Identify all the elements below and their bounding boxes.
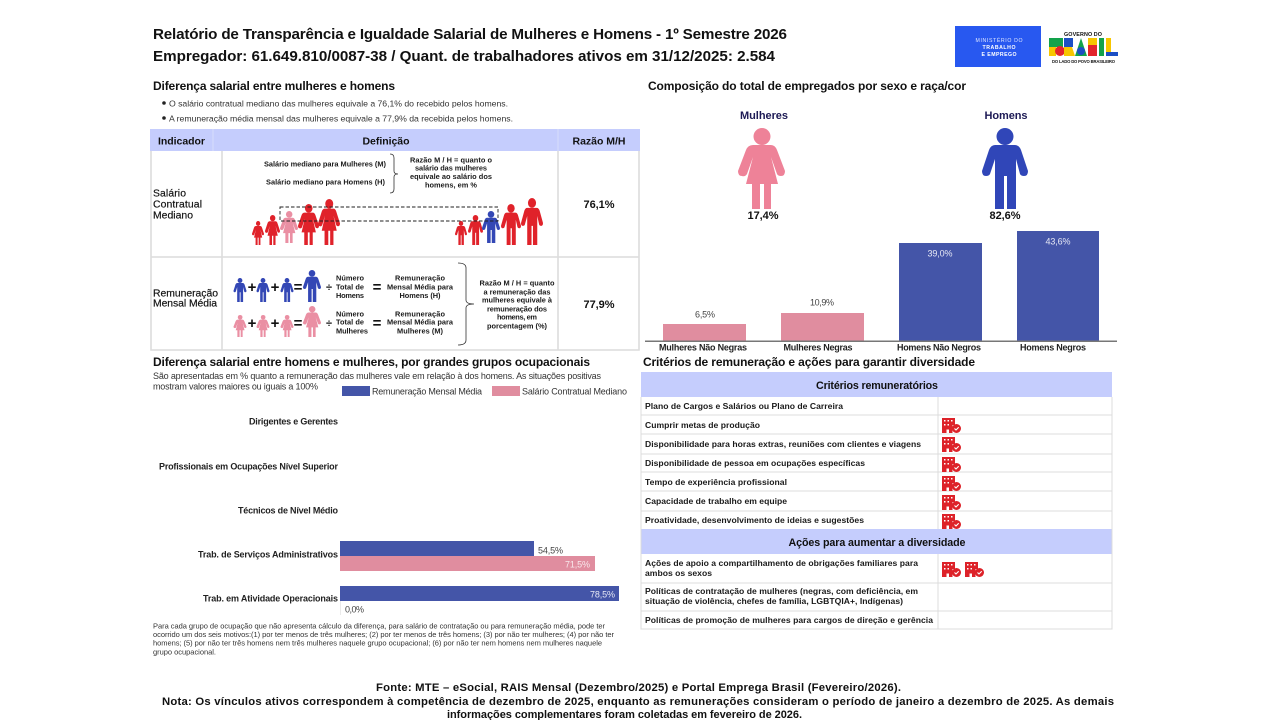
summary bullets: A remuneração média mensal das mulheres equivale a 77,9% da recebida pelos homens.: [169, 114, 513, 124]
logo: Ministério do Trabalho e Emprego: MINISTÉRIO DO: [976, 37, 1022, 44]
formula: men: Total de: [336, 282, 364, 292]
icon: man: [982, 128, 1028, 209]
explanation: median ratio: [410, 156, 492, 190]
header: Critérios remuneratórios: Critérios remuneratórios: [816, 380, 938, 392]
explanation: median ratio: salário das mulheres: [415, 164, 487, 172]
table header: Razão M/H: [572, 136, 626, 148]
group: Atividade Operacional: 0,0%: [345, 604, 364, 614]
report title: Relatório de Transparência e Igualdade Salarial de Mulheres e Homens - 1º Semestre 2026: [153, 26, 787, 43]
criterion rows: Disponibilidade para horas extras, reuniões com clientes e viagens: [645, 439, 921, 449]
formula: men: =: [373, 279, 382, 296]
action rows: situação de violência, chefes de família, LGBTQIA+, Indígenas): [645, 596, 903, 606]
definition labels: median salary: Salário mediano para Mulheres (M): [264, 160, 387, 168]
action rows: [645, 558, 933, 625]
row label: remuneração mensal média: Remuneração: [153, 288, 218, 300]
summary bullets: [162, 98, 513, 124]
row label: remuneração mensal média: [153, 288, 218, 310]
definition labels: median salary: Salário mediano para Homens (H): [266, 178, 386, 186]
icons: action company check marks: [942, 562, 984, 577]
explanation: average ratio: remuneração dos: [487, 304, 547, 314]
explanation: median ratio: Razão M / H = quanto o: [410, 156, 492, 164]
bar: Mulheres Negras: 10,9%: [810, 298, 834, 308]
source and note: [162, 682, 1114, 720]
explanation: average ratio: porcentagem (%): [487, 322, 548, 330]
bar chart: occupational groups: [159, 416, 619, 615]
icons: women ordered by salary: [252, 199, 340, 245]
formula: men: Homens: [336, 291, 364, 300]
row label: salário contratual mediano: Contratual: [153, 200, 202, 210]
section heading: criteria: Critérios de remuneração e ações para garantir diversidade: [643, 355, 975, 369]
footnote: grupo ocupacional.: [153, 648, 216, 656]
group: Dirigentes e Gerentes: Dirigentes e Gerentes: [249, 416, 338, 426]
group: Serviços Administrativos: 71,5%: [565, 560, 590, 570]
gender composition: men: 82,6%: [990, 210, 1021, 222]
criterion rows: Capacidade de trabalho em equipe: [645, 496, 787, 506]
panel: indicator table: [150, 129, 640, 350]
panel: criteria and actions table: [641, 372, 1112, 629]
logo: Ministério do Trabalho e Emprego: [955, 26, 1041, 67]
group: Atividade Operacional: Trab. em Atividade Operacionais: [203, 594, 338, 604]
chart description: [153, 371, 602, 392]
action rows: Ações de apoio a compartilhamento de obrigações familiares para: [645, 558, 918, 568]
footnote: homens; (5) por não ter três homens nem três mulheres naquele grupo ocupacional; (6) por não ter nem homens nem mulheres naquele: [153, 638, 602, 648]
explanation: median ratio: equivale ao salário dos: [410, 172, 492, 181]
value: 76,1%: 76,1%: [584, 199, 615, 211]
explanation: average ratio: mulheres equivale à: [482, 296, 553, 304]
gender composition: men: [982, 110, 1028, 222]
formula: men: Mensal Média para: [387, 282, 454, 292]
chart description: São apresentadas em % quanto a remuneração das mulheres vale em relação à dos homens. As situações positivas: [153, 371, 602, 381]
gender composition: women: [738, 110, 788, 222]
explanation: average ratio: [480, 278, 555, 330]
formula: women: +: [248, 315, 257, 332]
footnote: [153, 622, 614, 656]
brace: median salary: [390, 154, 398, 193]
header: Ações para aumentar a diversidade: Ações para aumentar a diversidade: [788, 537, 966, 549]
chart legend: Remuneração Mensal Média: [372, 386, 482, 396]
explanation: average ratio: homens, em: [497, 312, 537, 322]
explanation: median ratio: homens, em %: [425, 180, 477, 190]
group: Atividade Operacional: 78,5%: [590, 590, 615, 600]
group: Profissionais: Profissionais em Ocupações Nível Superior: [159, 462, 338, 472]
table header: [158, 136, 626, 148]
source and note: Nota: Os vínculos ativos correspondem à competência de dezembro de 2025, enquanto as remunerações consideram o período de janeiro a dezembro de 2025. As demais: [162, 696, 1114, 708]
logo: Ministério do Trabalho e Emprego: TRABALHO: [982, 45, 1016, 51]
chart legend: Salário Contratual Mediano: [522, 386, 627, 396]
summary bullets: O salário contratual mediano das mulheres equivale a 76,1% do recebido pelos homens.: [169, 98, 508, 108]
icons: company check marks: [942, 418, 961, 529]
report title: Empregador: 61.649.810/0087-38 / Quant. de trabalhadores ativos em 31/12/2025: 2.584: [153, 48, 776, 65]
action rows: Políticas de contratação de mulheres (negras, com deficiência, em: [645, 586, 918, 596]
criterion rows: Tempo de experiência profissional: [645, 477, 787, 487]
group: Atividade Operacional: [203, 586, 619, 615]
formula: women: Remuneração: [395, 310, 445, 318]
chart legend: [342, 386, 627, 396]
formula: women: ÷: [326, 318, 332, 330]
formula: women: Mensal Média para: [387, 318, 454, 326]
source and note: Fonte: MTE – eSocial, RAIS Mensal (Dezembro/2025) e Portal Emprega Brasil (Fevereiro/2026).: [376, 682, 901, 694]
bar: Homens Não Negros: Homens Não Negros: [897, 342, 981, 352]
formula: men: +: [271, 279, 280, 296]
formula: women: Total de: [336, 318, 364, 326]
formula: women: Número: [336, 310, 364, 318]
logo: Governo do Brasil: DO LADO DO POVO BRASILEIRO: [1052, 59, 1116, 64]
section heading: salary difference: Diferença salarial entre mulheres e homens: [153, 79, 395, 93]
action rows: Políticas de promoção de mulheres para cargos de direção e gerência: [645, 615, 933, 625]
gender composition: women: Mulheres: [740, 110, 788, 122]
formula: men: =: [294, 279, 303, 296]
group: Serviços Administrativos: Trab. de Serviços Administrativos: [198, 550, 338, 560]
formula: women: =: [373, 315, 382, 332]
formula: men: Número: [336, 274, 364, 282]
bar: Mulheres Negras: [781, 298, 864, 352]
bar: Homens Não Negros: [897, 243, 982, 352]
footnote: ocorrido um dos seis motivos:(1) por ter menos de três mulheres; (2) por ter menos de três homens; (3) por não ter mulheres; (4) por não ter: [153, 630, 614, 639]
bar: Mulheres Negras: Mulheres Negras: [784, 342, 852, 352]
logo: Governo do Brasil: GOVERNO DO: [1064, 32, 1102, 38]
row label: remuneração mensal média: Mensal Média: [153, 298, 217, 310]
formula: men: +: [248, 279, 257, 296]
bar chart: composition by sex and race: [645, 231, 1117, 352]
row label: salário contratual mediano: [153, 188, 202, 222]
criterion rows: [645, 401, 921, 525]
dashed median box: [280, 207, 498, 221]
bar: Homens Negros: 43,6%: [1046, 236, 1070, 246]
bar: Mulheres Não Negras: [659, 310, 747, 352]
icons: men ordered by salary: [455, 198, 543, 245]
criterion rows: Plano de Cargos e Salários ou Plano de Carreira: [645, 401, 843, 411]
row label: salário contratual mediano: Salário: [153, 188, 186, 200]
formula: women: Mulheres (M): [397, 326, 444, 336]
explanation: average ratio: a remuneração das: [484, 288, 550, 296]
bar: Homens Negros: [1017, 231, 1099, 352]
group: Técnicos: Técnicos de Nível Médio: [238, 506, 338, 516]
group: Serviços Administrativos: [198, 541, 595, 571]
gender composition: women: 17,4%: [748, 210, 779, 222]
formula: men: [234, 270, 454, 302]
icon: woman: [738, 128, 785, 209]
logo: Governo do Brasil: [1049, 32, 1118, 64]
footnote: Para cada grupo de ocupação que não apresenta cálculo da diferença, para salário de contratação ou para remuneração média, pode ter: [153, 622, 606, 630]
criterion rows: Disponibilidade de pessoa em ocupações específicas: [645, 458, 865, 468]
table header: Definição: [362, 136, 410, 148]
formula: men: ÷: [326, 282, 332, 294]
explanation: average ratio: Razão M / H = quanto: [480, 278, 555, 288]
section heading: composition: Composição do total de empregados por sexo e raça/cor: [648, 79, 966, 93]
bar: Homens Negros: Homens Negros: [1020, 342, 1086, 352]
chart description: mostram valores maiores ou iguais a 100%: [153, 382, 318, 392]
bar: Homens Não Negros: 39,0%: [928, 248, 952, 258]
formula: women: Mulheres: [336, 326, 368, 336]
formula: women: +: [271, 315, 280, 332]
definition labels: median salary: [264, 160, 387, 186]
formula: women: [234, 306, 454, 337]
formula: men: Homens (H): [400, 291, 441, 300]
bar: Mulheres Não Negras: Mulheres Não Negras: [659, 342, 747, 352]
logo: Ministério do Trabalho e Emprego: E EMPREGO: [982, 52, 1016, 58]
criterion rows: Cumprir metas de produção: [645, 420, 760, 430]
formula: men: Remuneração: [395, 274, 445, 282]
bar: Mulheres Não Negras: 6,5%: [695, 310, 715, 320]
group: Serviços Administrativos: 54,5%: [538, 546, 563, 556]
report title: [153, 26, 787, 65]
action rows: ambos os sexos: [645, 568, 712, 578]
brace: average pay: [458, 263, 474, 345]
row label: salário contratual mediano: Mediano: [153, 210, 193, 222]
gender composition: men: Homens: [984, 110, 1028, 122]
value: 77,9%: 77,9%: [584, 299, 615, 311]
criterion rows: Proatividade, desenvolvimento de ideias e sugestões: [645, 515, 864, 525]
table header: Indicador: [158, 136, 205, 148]
section heading: occupational groups: Diferença salarial entre homens e mulheres, por grandes grupos ocupacionais: [153, 355, 590, 369]
formula: women: =: [294, 315, 303, 332]
